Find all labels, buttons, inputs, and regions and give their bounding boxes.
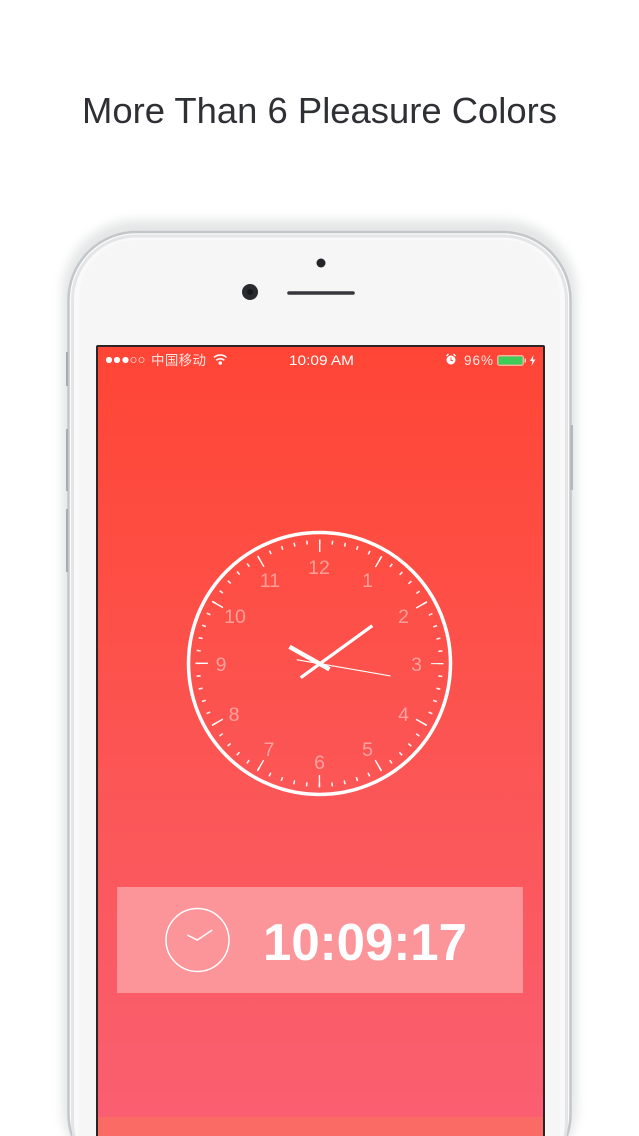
proximity sensor — [316, 258, 326, 268]
carrier: 中国移动 — [151, 353, 206, 368]
front camera — [242, 284, 258, 300]
hour ticks — [202, 546, 437, 781]
charging bolt — [530, 355, 535, 366]
clock numerals: 4 — [398, 704, 409, 726]
digital time panel — [117, 887, 523, 993]
battery icon — [498, 356, 526, 366]
analog clock — [188, 532, 450, 794]
clock numerals — [216, 557, 422, 774]
clock numerals: 5 — [362, 739, 373, 761]
clock numerals: 6 — [314, 752, 325, 774]
clock numerals: 3 — [411, 654, 422, 676]
clock numerals: 9 — [216, 654, 226, 676]
wifi icon — [214, 355, 226, 364]
title: More Than 6 Pleasure Colors — [82, 90, 557, 131]
digital time: 10:09:17 — [263, 914, 467, 972]
clock numerals: 2 — [398, 606, 409, 628]
speaker — [289, 291, 353, 295]
time: 10:09 AM — [289, 353, 354, 368]
clock numerals: 7 — [264, 739, 274, 761]
status bar — [106, 353, 535, 368]
clock numerals: 10 — [224, 606, 246, 628]
minute hand — [301, 626, 372, 678]
clock rim — [188, 532, 450, 794]
signal dots — [106, 357, 144, 363]
clock numerals: 11 — [260, 570, 280, 592]
clock numerals: 12 — [308, 557, 330, 579]
clock numerals: 8 — [229, 704, 239, 726]
clock numerals: 1 — [362, 570, 373, 592]
second hand — [297, 660, 391, 676]
phone body — [62, 220, 577, 1136]
clock icon — [166, 908, 229, 972]
side button: power — [570, 425, 573, 490]
bottom strip — [98, 1117, 543, 1136]
screen — [96, 345, 545, 1136]
minute ticks — [198, 542, 441, 785]
battery percent: 96% — [464, 353, 493, 368]
side buttons: volume and mute — [66, 352, 68, 572]
hour hand — [290, 647, 330, 669]
alarm icon — [446, 354, 456, 364]
